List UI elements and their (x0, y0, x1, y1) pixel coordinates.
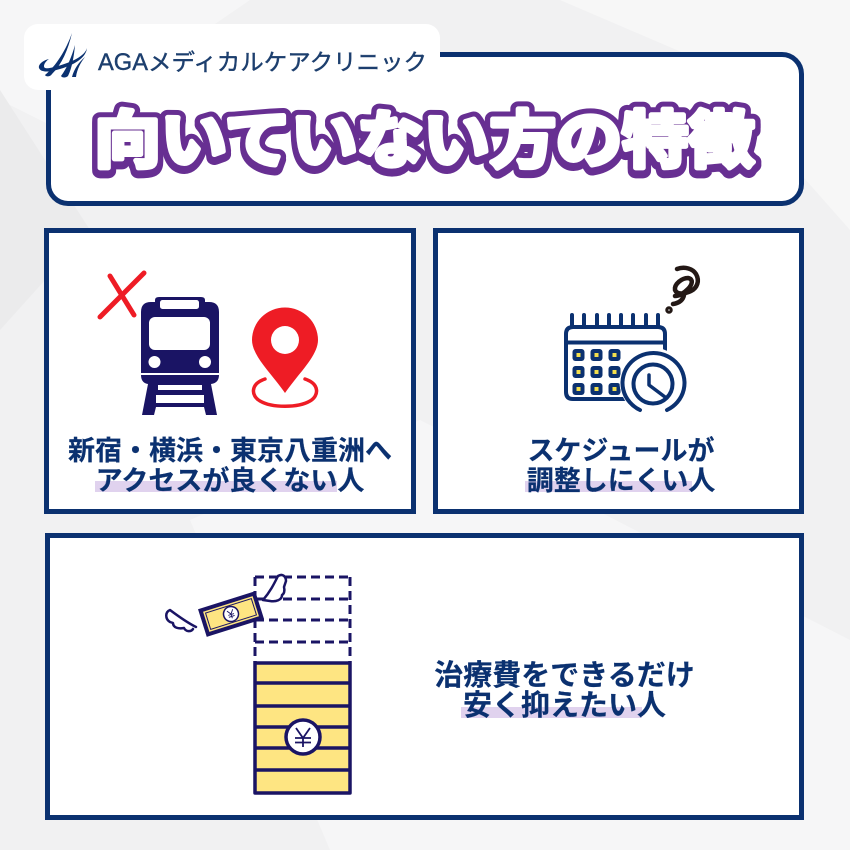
highlight: access (95, 481, 337, 492)
logo: AGA Medical Care Clinic: AGA (98, 49, 148, 76)
logo plate (24, 24, 440, 90)
panel: schedule (433, 228, 804, 514)
text: cost: 治療費をできるだけ (434, 660, 695, 692)
text: schedule: 調整しにくい人 (527, 466, 715, 496)
panel: title box (46, 52, 804, 206)
panel: cost (45, 533, 804, 820)
text: cost (434, 660, 695, 722)
highlight: cost (461, 707, 642, 718)
text: access: アクセスが良くない人 (96, 466, 364, 496)
logo: AGA Medical Care Clinic: メディカルケアクリニック (148, 49, 427, 75)
text: access: 新宿・横浜・東京八重洲へ (68, 436, 392, 466)
text: schedule (527, 436, 715, 496)
text: access (68, 436, 392, 496)
text: schedule: スケジュールが (527, 436, 715, 466)
title: 向いていない方の特徴 (94, 107, 754, 176)
title: 向いていない方の特徴 (94, 110, 754, 179)
panel: access (44, 228, 416, 514)
title: 向いていない方の特徴 (94, 107, 754, 176)
text: cost: 安く抑えたい人 (463, 690, 666, 722)
highlight: schedule (525, 481, 692, 492)
